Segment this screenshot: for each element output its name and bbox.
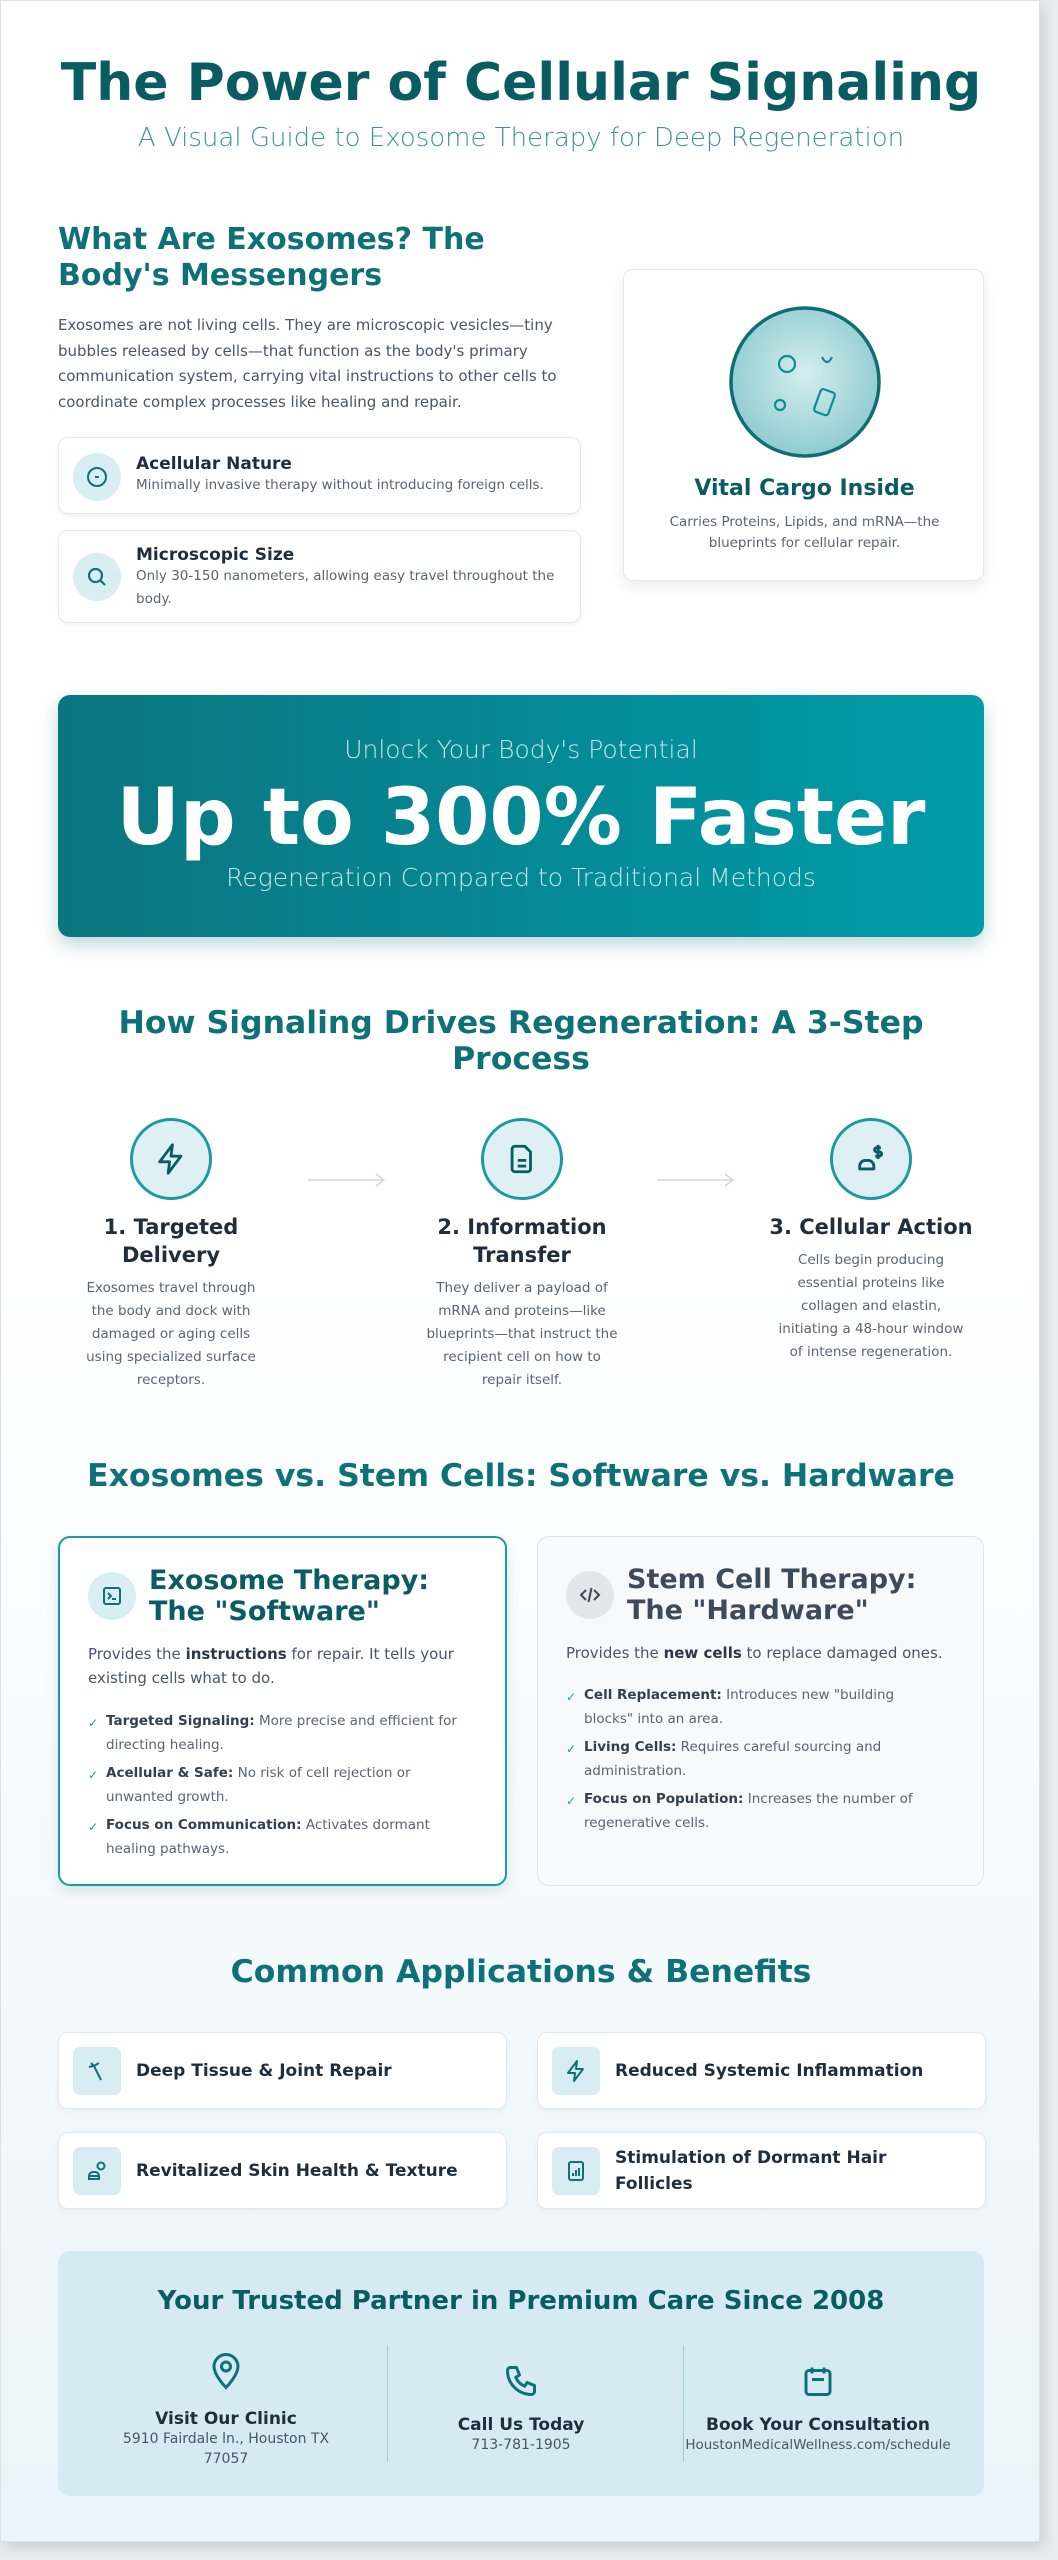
panel: vital cargo [623,269,984,581]
contact: book [685,2368,951,2453]
text: stem panel title: Stem Cell Therapy: [627,1564,916,1595]
contact: call [458,2366,584,2453]
icon: bolt [130,1118,212,1200]
text: acellular [136,454,544,493]
text: microscopic: Only 30-150 nanometers, allowing easy travel throughout the body. [136,568,554,607]
icon: chart [552,2147,600,2195]
step 3 [769,1118,973,1360]
arrow 2 [657,1174,734,1186]
list: stem cell points: Focus on Population: Increases the number of regenerative cells. [584,1791,913,1831]
icon: exosome vesicle [729,306,881,458]
icon: document [481,1118,563,1200]
banner: 300% faster [58,695,984,937]
contact: call: Call Us Today [458,2415,584,2435]
list: exosome benefits: Targeted Signaling: More precise and efficient for directing healing. [106,1713,457,1753]
list: stem cell points: Living Cells: Requires careful sourcing and administration. [584,1739,881,1779]
text: stem panel title [627,1564,916,1626]
list: exosome benefits: Acellular & Safe: No risk of cell rejection or unwanted growth. [106,1765,411,1805]
text: comparison: Regeneration Compared to Traditional Methods [226,863,816,892]
panel: contact [58,2251,984,2496]
heading: applications: Common Applications & Benefits [231,1954,811,1990]
card: hair follicles [537,2132,986,2209]
text: vital cargo desc: Carries Proteins, Lipids, and mRNA—the blueprints for cellular repair. [670,514,939,551]
list: exosome benefits: Focus on Communication: Activates dormant healing pathways. [106,1817,430,1857]
text block: exosome intro: Exosomes are not living cells. They are microscopic vesicles—tiny bubbles released by cells—that function as the body's primary communication system, carrying vital instructions to other cells to coordinate complex processes like healing and repair. [58,316,557,410]
icon: bolt [552,2047,600,2095]
panel: stem cell therapy [537,1536,984,1886]
step 2 [426,1118,618,1388]
text: step 3 title: 3. Cellular Action [769,1215,973,1239]
contact: visit clinic: Visit Our Clinic [155,2409,297,2429]
card: skin health [58,2132,507,2209]
text: vital cargo title: Vital Cargo Inside [694,476,915,501]
card: skin health: Revitalized Skin Health & Texture [136,2160,458,2180]
card: hair follicles: Stimulation of Dormant Hair Follicles [615,2148,886,2194]
text: acellular: Minimally invasive therapy without introducing foreign cells. [136,477,544,493]
panel: exosome therapy [58,1536,507,1886]
card: microscopic size [58,530,581,623]
text: step 1 title: 1. Targeted Delivery [104,1215,238,1267]
text: microscopic [136,545,554,607]
icon: hand with dollar [830,1118,912,1200]
arrow 1 [308,1174,385,1186]
subtitle: A Visual Guide to Exosome Therapy for Deep Regeneration [138,123,904,153]
icon: minus circle [73,453,121,501]
card: acellular nature [58,437,581,514]
text: stem panel title: The "Hardware" [627,1595,869,1626]
icon: map pin [212,2353,240,2390]
icon: calendar [804,2368,832,2396]
icon: joint [73,2047,121,2095]
icon: magnifier [73,553,121,601]
text: exosome panel intro: Provides the instructions for repair. It tells your existing cells what to do. [88,1645,454,1687]
text: exosome panel title: Exosome Therapy: [149,1565,429,1596]
text: microscopic: Microscopic Size [136,545,294,565]
heading: exosomes vs stem cells: Exosomes vs. Stem Cells: Software vs. Hardware [87,1458,955,1494]
icon: phone [506,2366,536,2396]
text: exosome panel title: The "Software" [149,1596,380,1627]
list: stem cell points [568,1687,913,1831]
card: inflammation: Reduced Systemic Inflammation [615,2060,923,2080]
contact: book: HoustonMedicalWellness.com/schedule [685,2437,951,2453]
text: unlock: Unlock Your Body's Potential [344,735,698,764]
card: inflammation [537,2032,986,2109]
text: stem panel intro: Provides the new cells to replace damaged ones. [566,1644,943,1662]
contact: visit clinic: 5910 Fairdale ln., Houston TX 77057 [123,2431,329,2467]
card: joint repair: Deep Tissue & Joint Repair [136,2060,392,2080]
heading: what are exosomes: What Are Exosomes? The Body's Messengers [58,222,485,293]
contact: call: 713-781-1905 [471,2437,571,2453]
list: exosome benefits [90,1713,457,1857]
text: big stat: Up to 300% Faster [117,773,925,863]
contact: visit clinic [123,2353,329,2467]
icon: code [566,1571,614,1619]
card: joint repair [58,2032,507,2109]
title: The Power of Cellular Signaling [61,53,981,113]
icon: terminal [88,1572,136,1620]
step 1 [86,1118,256,1388]
icon: skin [73,2147,121,2195]
text: acellular: Acellular Nature [136,454,292,474]
text: step 2 desc: They deliver a payload of mRNA and proteins—like blueprints—that instruct the recipient cell on how to repair itself. [426,1280,618,1388]
text: step 2 title: 2. Information Transfer [437,1215,607,1267]
text: exosome panel title [149,1565,429,1627]
text: step 1 desc: Exosomes travel through the body and dock with damaged or aging cells using specialized surface receptors. [86,1280,256,1388]
heading: trusted partner: Your Trusted Partner in Premium Care Since 2008 [158,2286,884,2316]
contact: book: Book Your Consultation [706,2415,930,2435]
text: step 3 desc: Cells begin producing essential proteins like collagen and elastin, initiating a 48-hour window of intense regeneration. [779,1252,963,1360]
list: stem cell points: Cell Replacement: Introduces new "building blocks" into an area. [584,1687,894,1727]
heading: 3-step process: How Signaling Drives Regeneration: A 3-Step Process [118,1005,924,1077]
